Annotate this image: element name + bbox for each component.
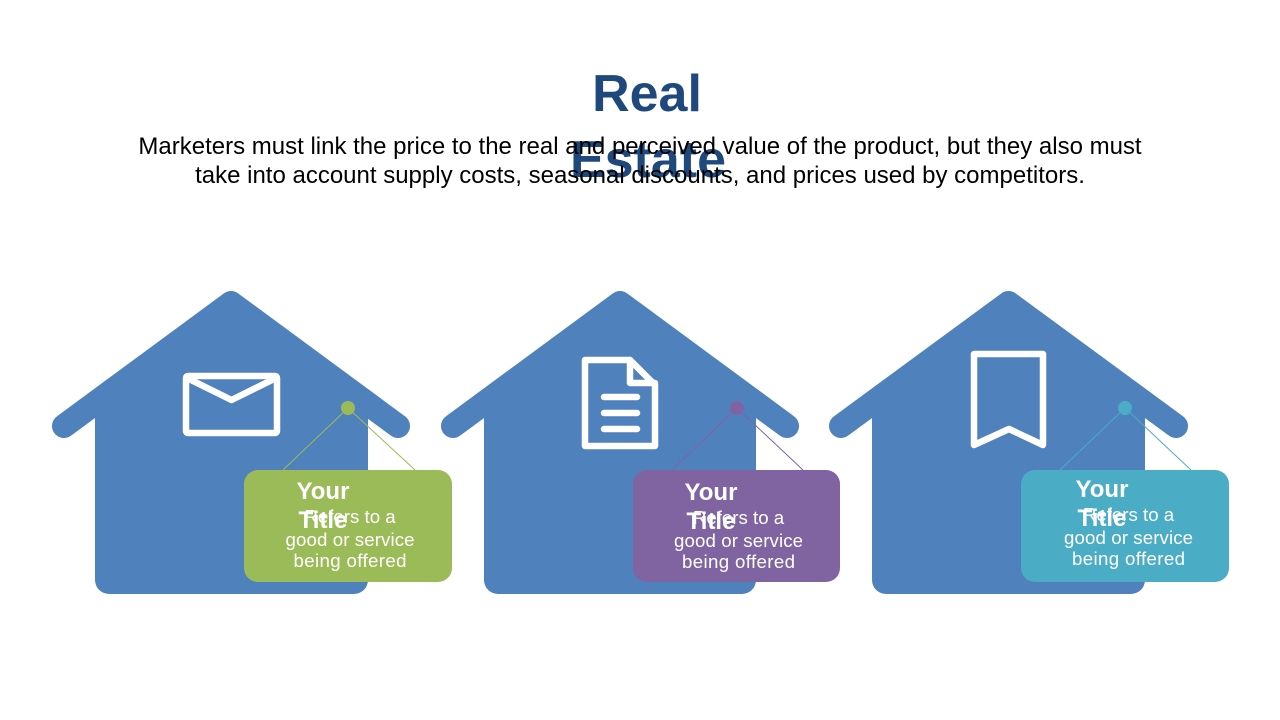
title: Estate [570,131,726,189]
connector dot [730,401,744,415]
connector lines [672,408,803,470]
description text: Marketers must link the price to the real and perceived value of the product, but they also must [138,133,1142,160]
callout card [633,470,840,582]
card title [685,479,737,535]
card text: being offered [294,550,406,571]
description text: take into account supply costs, seasonal discounts, and prices used by competitors. [195,162,1085,189]
card text: Refers to a [304,506,396,527]
connector lines [283,408,415,470]
panel: house 2 [453,303,840,594]
title: Real [592,65,702,123]
card title: Your [685,479,737,506]
icon: envelope [186,376,277,433]
card title [297,478,349,534]
icon: bookmark [974,354,1043,445]
card title: Your [1076,476,1128,503]
card text: Refers to a [1083,504,1175,525]
card text [286,506,414,571]
card text: good or service [674,530,803,551]
connector lines [1060,408,1191,470]
card text [674,507,803,572]
card text [1064,504,1193,569]
card title: Title [1078,505,1126,532]
connector dot [341,401,355,415]
card text: being offered [1072,548,1185,569]
card text: Refers to a [693,507,785,528]
card text: being offered [682,551,795,572]
icon: document [585,360,655,446]
callout card [1021,470,1229,582]
card title: Your [297,478,349,505]
panel: house 1 [64,303,452,594]
house shape [64,303,398,594]
card title: Title [299,507,347,534]
panel: house 3 [841,303,1229,594]
house shape [841,303,1176,594]
card title [1076,476,1128,532]
house shape [453,303,787,594]
connector dot [1118,401,1132,415]
callout card [244,470,452,582]
card text: good or service [1064,527,1193,548]
card text: good or service [286,529,414,550]
title [570,65,726,189]
card title: Title [687,508,735,535]
description text [138,133,1142,189]
